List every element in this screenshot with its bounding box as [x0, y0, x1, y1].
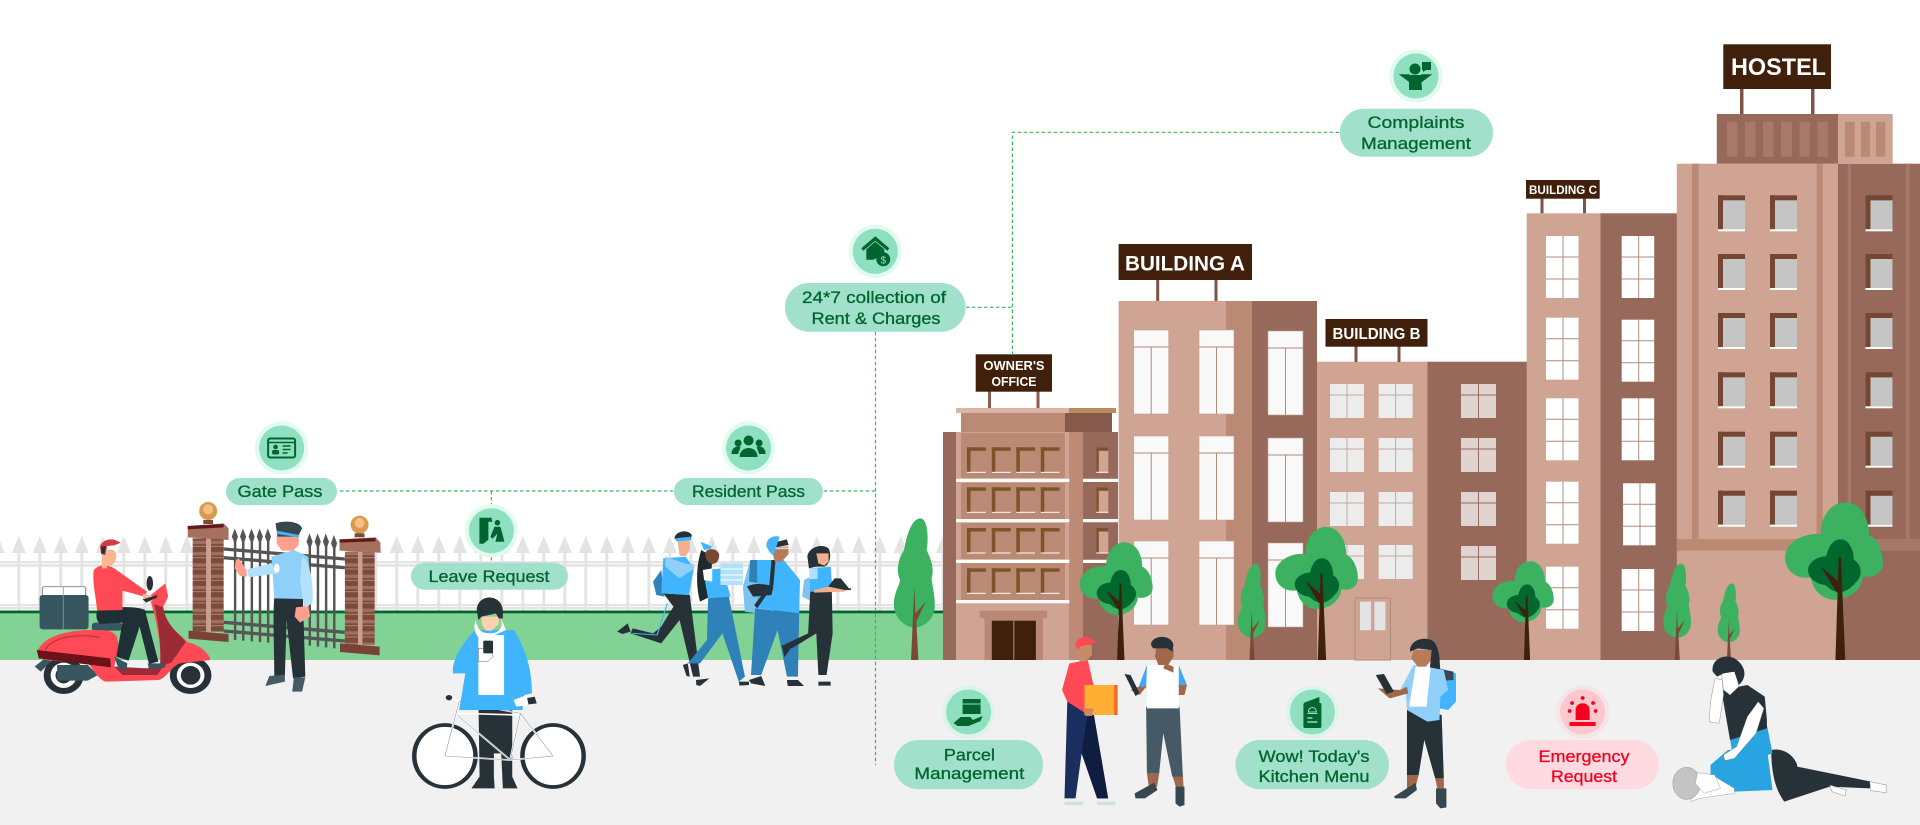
sign: building B: BUILDING B	[1332, 326, 1420, 343]
callout: rent collection	[785, 225, 966, 332]
callout: parcel management	[894, 685, 1043, 789]
callout: leave request: Leave Request	[428, 567, 550, 586]
building C	[1526, 180, 1677, 660]
student with backpack	[743, 536, 804, 686]
sign: owner's office	[976, 354, 1052, 408]
delivery man	[1062, 637, 1118, 805]
runner student	[617, 531, 709, 686]
callout: emergency request: Request	[1551, 767, 1617, 786]
icon: menu card	[1286, 685, 1339, 739]
trees	[894, 502, 1883, 660]
rooftop	[1717, 114, 1893, 164]
security guard	[235, 522, 313, 692]
building A	[1119, 244, 1317, 660]
student with phone	[1376, 639, 1456, 808]
callout: resident pass	[674, 421, 823, 505]
callout: kitchen menu: Kitchen Menu	[1258, 767, 1370, 786]
callout: emergency request	[1506, 685, 1659, 789]
callout: gate pass	[226, 421, 337, 505]
callout: complaints management	[1340, 49, 1493, 157]
icon: person leaving door	[465, 504, 518, 557]
lying person	[1673, 748, 1886, 802]
callout: gate pass: Gate Pass	[238, 482, 322, 501]
wheels	[35, 657, 211, 694]
kneeling woman	[1709, 656, 1773, 761]
scooter rider	[35, 539, 211, 694]
rider figure	[93, 539, 165, 670]
callout: rent collection: Rent & Charges	[812, 309, 940, 328]
sign: owner's office: OFFICE	[992, 374, 1037, 389]
delivery box	[40, 587, 89, 629]
sign: building C	[1526, 180, 1600, 213]
callout: emergency request: Emergency	[1538, 747, 1630, 766]
connector lines	[340, 132, 1340, 765]
icon: house with dollar: $	[881, 255, 887, 266]
sign: building C: BUILDING C	[1529, 185, 1597, 197]
cyclist	[414, 597, 584, 788]
sign: building A	[1119, 244, 1252, 301]
callout: parcel management: Management	[914, 764, 1025, 783]
pavement	[0, 660, 1920, 825]
resident with tablet	[1124, 637, 1187, 807]
right pillar	[340, 516, 380, 655]
owner's office building	[943, 354, 1118, 660]
callout: kitchen menu	[1236, 685, 1389, 789]
parcel delivery people	[1062, 637, 1187, 807]
callout: complaints management: Complaints	[1368, 113, 1464, 132]
residents group	[617, 531, 851, 686]
student with books	[683, 540, 749, 686]
callout: rent collection: 24*7 collection of	[802, 288, 946, 307]
woman helping collapsed person	[1673, 656, 1886, 802]
icon: alarm siren	[1556, 685, 1609, 739]
callout: resident pass: Resident Pass	[692, 482, 805, 501]
callout: leave request	[411, 504, 568, 590]
icon: person with speech bubble	[1389, 49, 1443, 103]
icon: parcel on hand	[942, 685, 995, 739]
sign: hostel	[1723, 44, 1831, 114]
sign: building B	[1326, 319, 1428, 362]
callout: kitchen menu: Wow! Today's	[1258, 747, 1370, 766]
lawn	[0, 610, 943, 661]
student with plate	[782, 546, 851, 686]
icon: house with dollar	[849, 225, 902, 278]
bicycle wheels	[414, 725, 584, 787]
hostel building	[1677, 44, 1920, 660]
sign: building A: BUILDING A	[1125, 252, 1245, 276]
door	[1355, 598, 1390, 660]
sign: owner's office: OWNER'S	[984, 358, 1045, 373]
sign: hostel: HOSTEL	[1731, 54, 1826, 81]
icon: id card	[255, 421, 308, 475]
building B	[1317, 319, 1527, 660]
callout: complaints management: Management	[1361, 134, 1471, 153]
icon: people	[722, 421, 775, 475]
perimeter fence	[0, 536, 943, 612]
callout: parcel management: Parcel	[944, 746, 995, 764]
scooter body	[37, 576, 210, 682]
bicycle frame	[445, 698, 553, 760]
left pillar	[188, 502, 229, 642]
gate	[188, 502, 380, 659]
